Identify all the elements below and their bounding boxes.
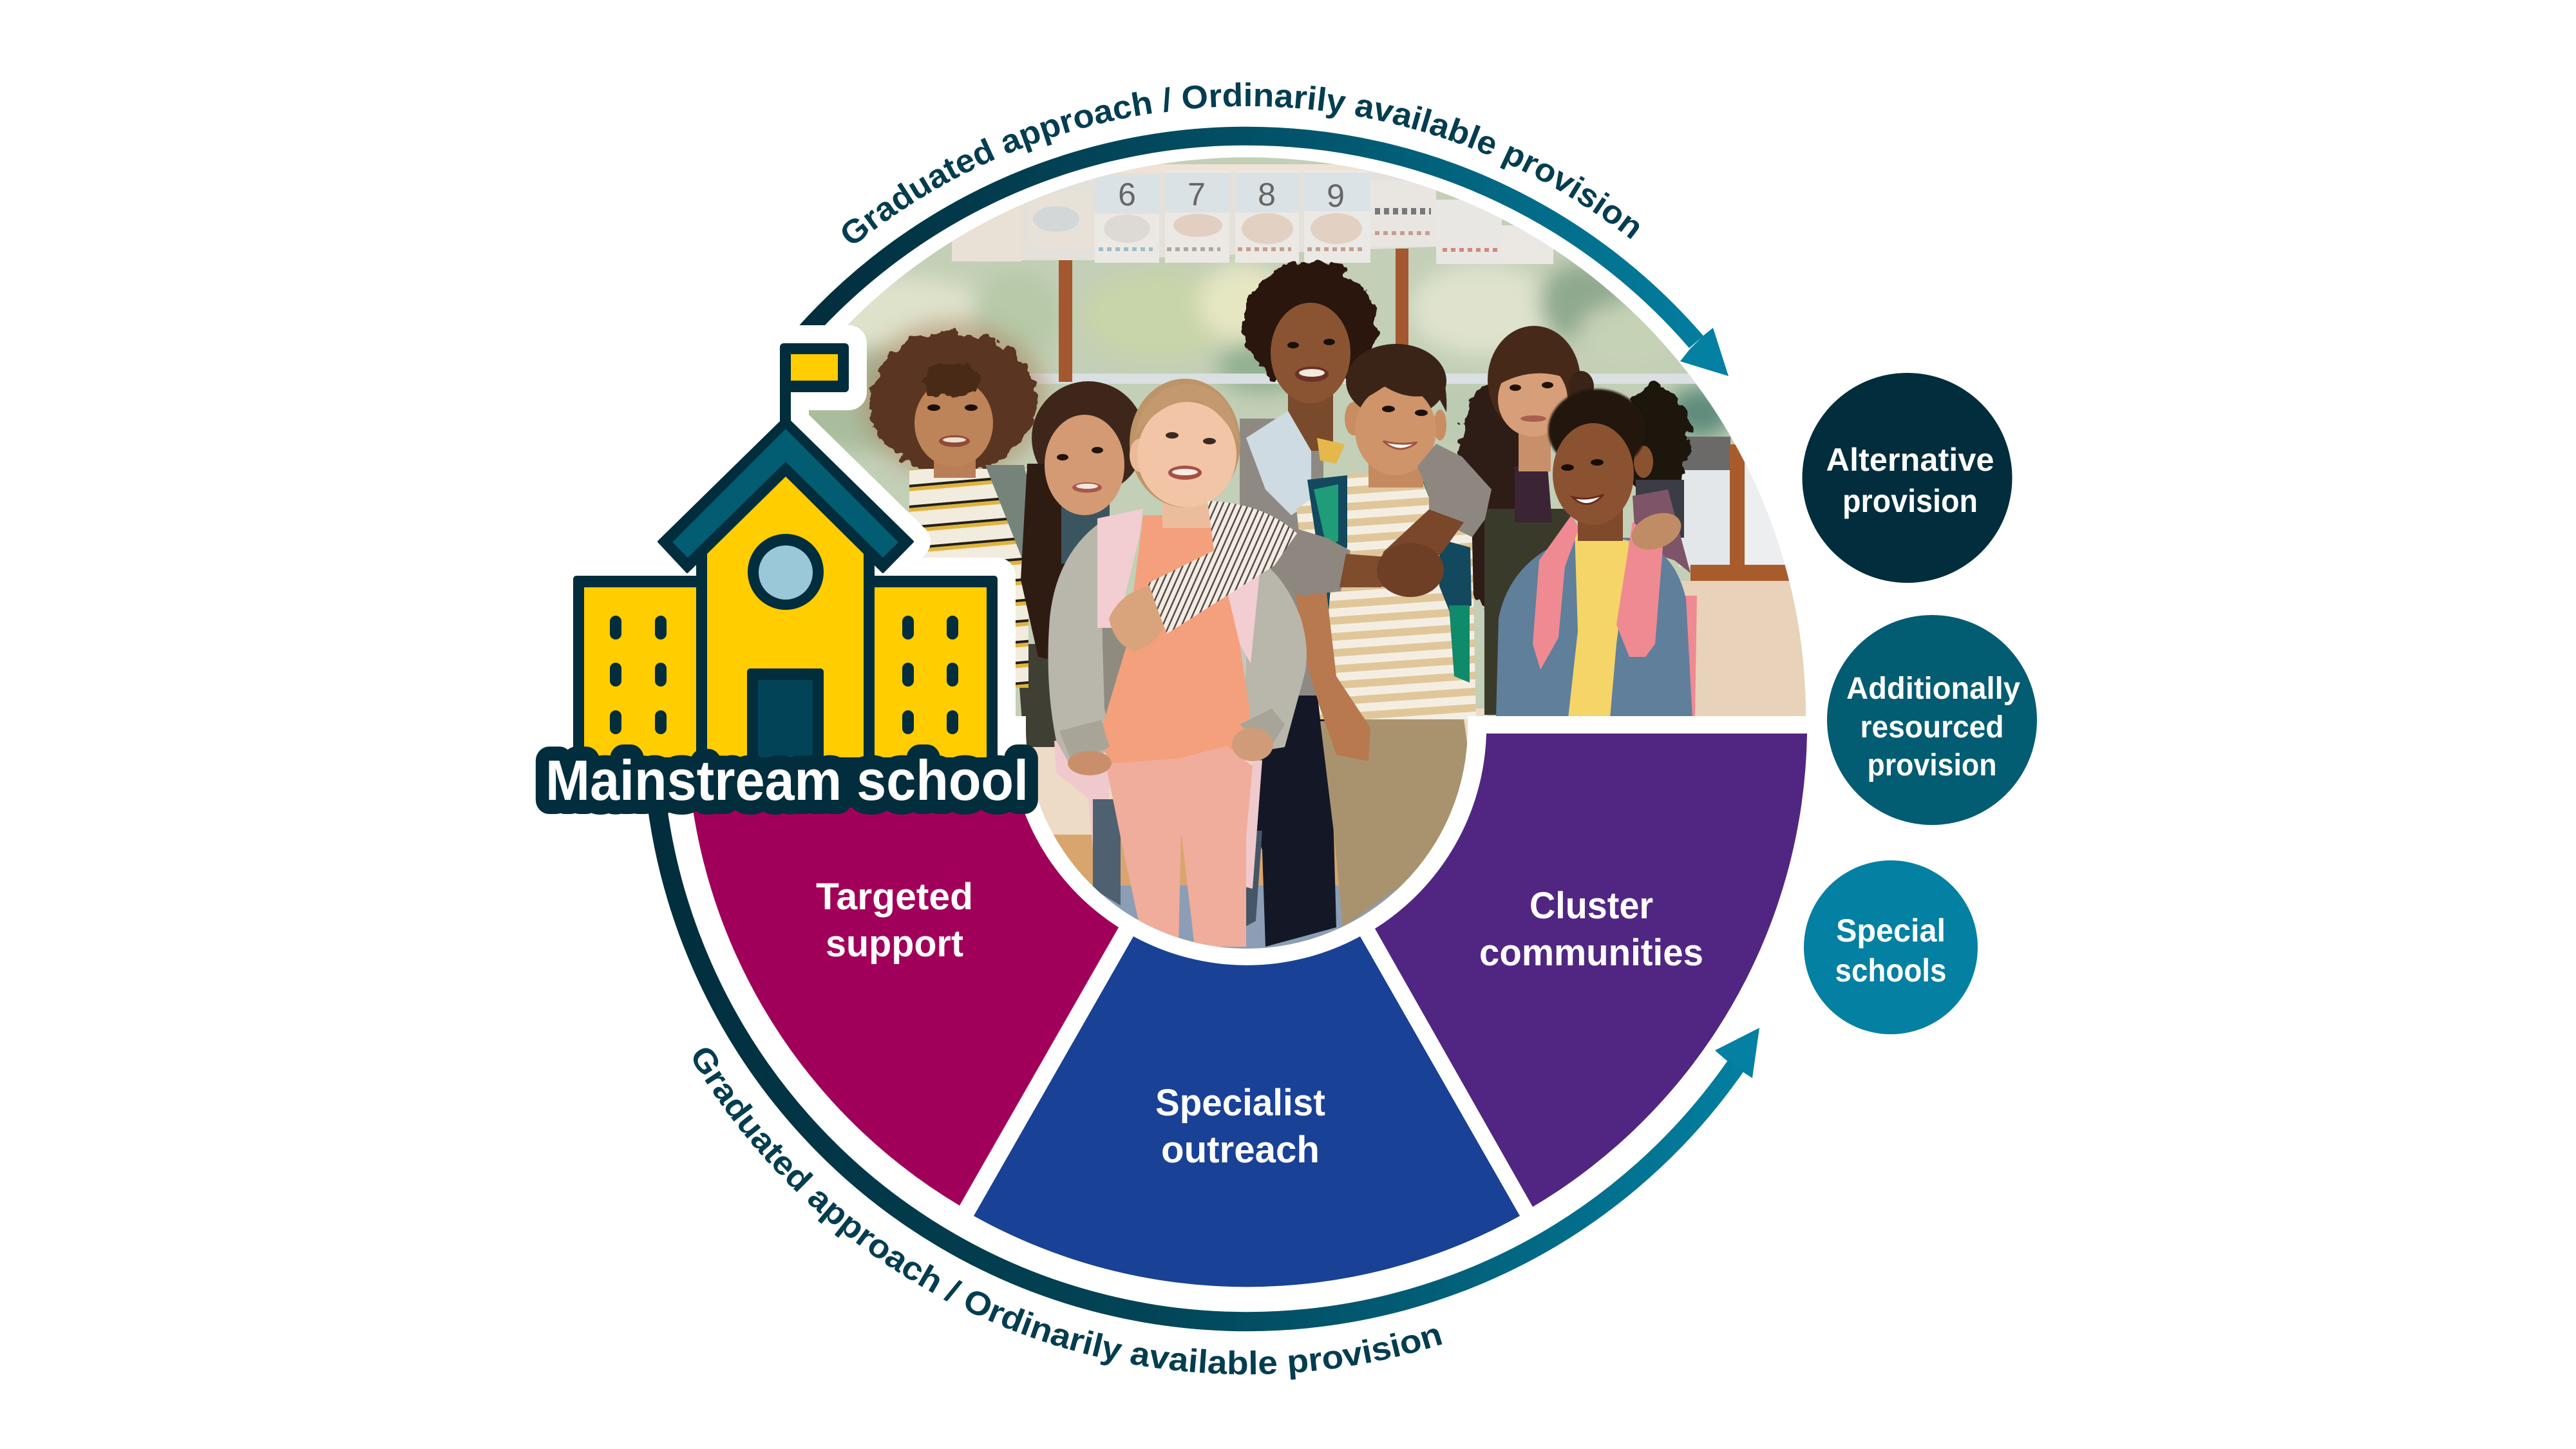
photo: tall boy in back <box>1240 262 1377 947</box>
circle: Alternative provision: Alternative <box>1826 442 1994 478</box>
photo: linked arms with quilted jacket <box>1296 444 1492 597</box>
curved label: bottom: Graduated approach / Ordinarily available provision <box>693 1048 1443 1379</box>
circle: Additionally resourced provision: provision <box>1868 748 1996 782</box>
photo: number posters: 7 <box>1188 176 1206 213</box>
photo: number posters: 8 <box>1258 176 1276 213</box>
circle: Special schools: Special <box>1836 913 1946 949</box>
circle: Alternative provision: provision <box>1842 483 1978 519</box>
arrow: bottom graduated approach arc <box>656 799 1759 1321</box>
segment: Cluster communities: Cluster <box>1530 885 1653 927</box>
segment: Cluster communities: communities <box>1479 932 1703 974</box>
photo: little girl in peach top <box>1048 379 1307 947</box>
icon: side wings <box>573 576 998 769</box>
circle: Additionally resourced provision <box>1827 615 2037 825</box>
photo: girl with fringe <box>1455 326 1594 715</box>
segment: Cluster communities <box>1375 734 1807 1207</box>
photo: girl with long dark hair <box>1021 381 1145 663</box>
panel: classroom photo of children <box>809 157 1806 949</box>
segment: Specialist outreach: outreach <box>1161 1129 1320 1171</box>
icon: school building sticker <box>573 343 998 769</box>
title: Mainstream school label: Mainstream school <box>545 748 1028 812</box>
circle: Special schools <box>1804 860 1978 1034</box>
icon: flag <box>780 343 849 425</box>
segment: Targeted support: support <box>826 923 963 965</box>
photo: smiling boy in striped shirt <box>1296 344 1476 927</box>
segment: Specialist outreach <box>974 936 1520 1287</box>
segment: Targeted support: Targeted <box>816 876 973 918</box>
curved label: top: Graduated approach / Ordinarily available provision <box>842 82 1640 243</box>
photo background: window and trees <box>809 157 1806 949</box>
icon: white sticker outline <box>573 343 998 753</box>
photo: girl with ponytail and denim jacket <box>1496 385 1697 718</box>
circle: Alternative provision <box>1802 373 2012 583</box>
photo: number posters <box>952 164 1553 264</box>
circle: Special schools: schools <box>1835 952 1946 989</box>
arrow: top graduated approach arc <box>792 136 1728 376</box>
photo: number posters: 9 <box>1327 178 1345 214</box>
segment: Targeted support <box>687 734 1119 1206</box>
circle: Additionally resourced provision: Additionally <box>1846 672 2020 706</box>
photo: number posters: 6 <box>1118 176 1136 213</box>
photo: boy with curly hair <box>860 321 1063 747</box>
segment: Specialist outreach: Specialist <box>1155 1082 1325 1124</box>
icon: central tower and roof <box>659 417 913 769</box>
circle: Additionally resourced provision: resourced <box>1860 710 2004 744</box>
